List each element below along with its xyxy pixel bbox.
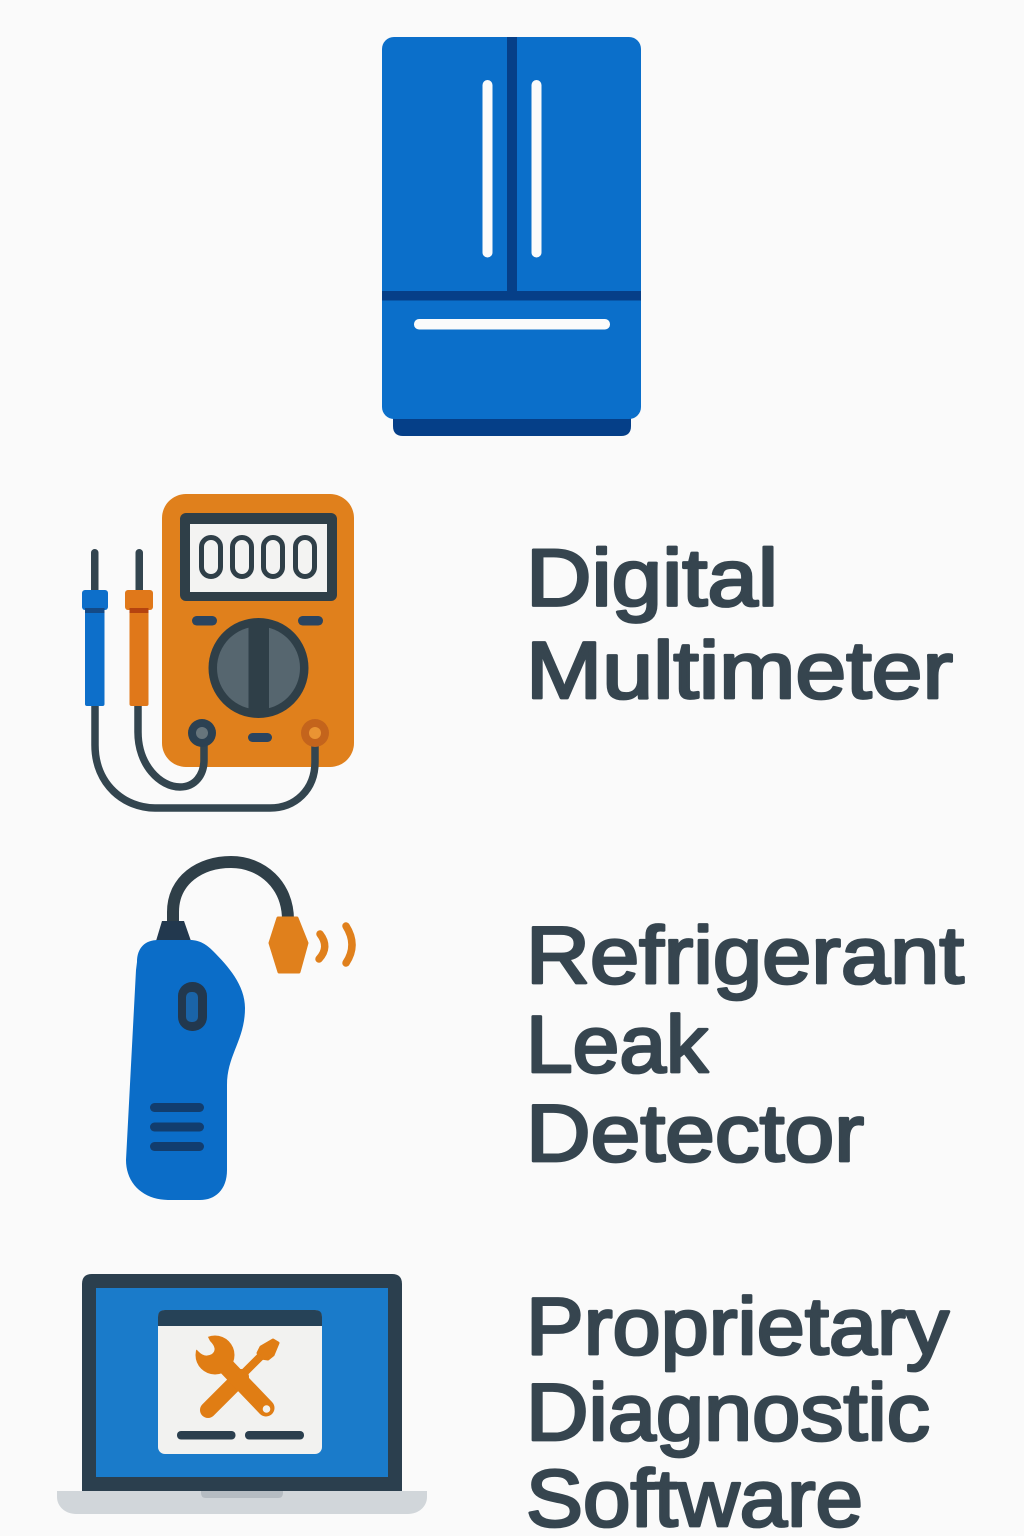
door divider vertical	[507, 37, 517, 293]
display digits	[202, 538, 314, 576]
laptop base	[57, 1491, 427, 1514]
laptop screen	[96, 1288, 388, 1477]
door divider horizontal	[382, 291, 641, 300]
power switch	[178, 982, 207, 1031]
fridge body	[382, 37, 641, 419]
cable collar	[156, 921, 191, 941]
laptop lid	[82, 1274, 402, 1491]
blue probe	[82, 549, 108, 706]
icon: laptop with diagnostic software	[57, 1274, 427, 1514]
sensor tip	[270, 918, 307, 972]
heading: Digital Multimeter: Multimeter	[526, 626, 953, 716]
heading: Digital Multimeter	[526, 534, 953, 716]
heading: Refrigerant Leak Detector	[526, 911, 964, 1179]
display screen	[190, 524, 327, 592]
meter body	[162, 494, 354, 767]
software window	[158, 1310, 322, 1454]
icon: digital multimeter	[82, 494, 354, 808]
red socket	[301, 719, 329, 747]
display frame	[180, 513, 337, 601]
heading: Refrigerant Leak Detector: Detector	[526, 1089, 864, 1179]
left button	[192, 616, 217, 626]
trackpad notch	[201, 1491, 283, 1498]
freezer handle	[414, 319, 610, 330]
test leads	[95, 704, 315, 808]
grille lines	[150, 1103, 204, 1151]
icon: refrigerator	[382, 37, 641, 436]
fridge base	[393, 410, 631, 436]
detector body	[126, 940, 245, 1200]
heading: Digital Multimeter: Digital	[526, 534, 778, 624]
black socket	[188, 719, 216, 747]
left door handle	[482, 80, 492, 258]
sensor cable	[173, 862, 288, 925]
screwdriver	[208, 1340, 278, 1410]
heading: Proprietary Diagnostic Software	[526, 1282, 950, 1536]
right door handle	[532, 80, 542, 258]
right button	[298, 616, 323, 626]
orange probe	[125, 549, 153, 706]
window text lines	[177, 1431, 304, 1440]
heading: Proprietary Diagnostic Software: Proprietary	[526, 1282, 950, 1372]
heading: Proprietary Diagnostic Software: Diagnostic	[526, 1368, 930, 1458]
heading: Refrigerant Leak Detector: Leak	[526, 1000, 709, 1090]
icon: refrigerant leak detector	[126, 862, 352, 1200]
signal waves	[319, 926, 352, 963]
heading: Refrigerant Leak Detector: Refrigerant	[526, 911, 964, 1001]
selector knob	[208, 618, 308, 718]
wrench	[188, 1332, 270, 1413]
center indicator	[248, 733, 272, 742]
tools icon: wrench and screwdriver	[188, 1332, 278, 1413]
